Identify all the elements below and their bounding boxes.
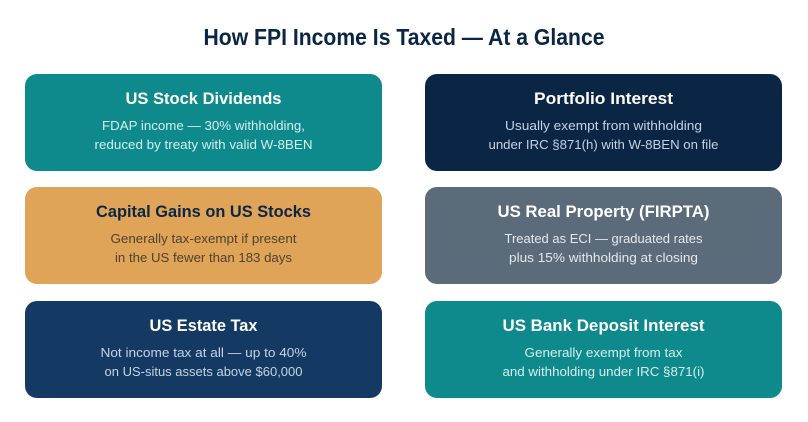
heading: portfolio interest: Portfolio Interest	[534, 89, 673, 108]
panel: US estate tax	[25, 301, 382, 398]
text: capital gains detail	[110, 231, 297, 265]
text: real property detail: plus 15% withholding at closing	[509, 250, 698, 265]
panel: portfolio interest	[425, 74, 782, 171]
panel: US bank deposit interest	[425, 301, 782, 398]
text: real property detail	[504, 231, 703, 265]
text: portfolio interest detail	[488, 118, 718, 152]
text: bank deposit detail: and withholding under IRC §871(i)	[502, 364, 704, 379]
text: capital gains detail: in the US fewer than 183 days	[115, 250, 292, 265]
text: estate tax detail	[100, 345, 307, 379]
panel: US stock dividends	[25, 74, 382, 171]
heading: US bank deposit interest: US Bank Deposit Interest	[502, 316, 705, 335]
text: dividends detail: FDAP income — 30% withholding,	[102, 118, 305, 133]
text: portfolio interest detail: Usually exempt from withholding	[505, 118, 702, 133]
heading: capital gains: Capital Gains on US Stocks	[96, 202, 311, 221]
panel: US real property	[425, 187, 782, 284]
text: estate tax detail: on US-situs assets above $60,000	[104, 364, 302, 379]
text: real property detail: Treated as ECI — graduated rates	[504, 231, 703, 246]
text: bank deposit detail: Generally exempt from tax	[524, 345, 683, 360]
panel: capital gains	[25, 187, 382, 284]
text: capital gains detail: Generally tax-exempt if present	[110, 231, 297, 246]
text: portfolio interest detail: under IRC §871(h) with W-8BEN on file	[488, 137, 718, 152]
text: dividends detail: reduced by treaty with valid W-8BEN	[94, 137, 312, 152]
text: bank deposit detail	[502, 345, 704, 379]
text: dividends detail	[94, 118, 312, 152]
title: How FPI Income Is Taxed — At a Glance	[204, 24, 604, 50]
heading: US estate tax: US Estate Tax	[150, 316, 258, 335]
heading: US real property: US Real Property (FIRPTA)	[498, 202, 710, 221]
heading: US stock dividends: US Stock Dividends	[126, 89, 282, 108]
text: estate tax detail: Not income tax at all — up to 40%	[100, 345, 307, 360]
